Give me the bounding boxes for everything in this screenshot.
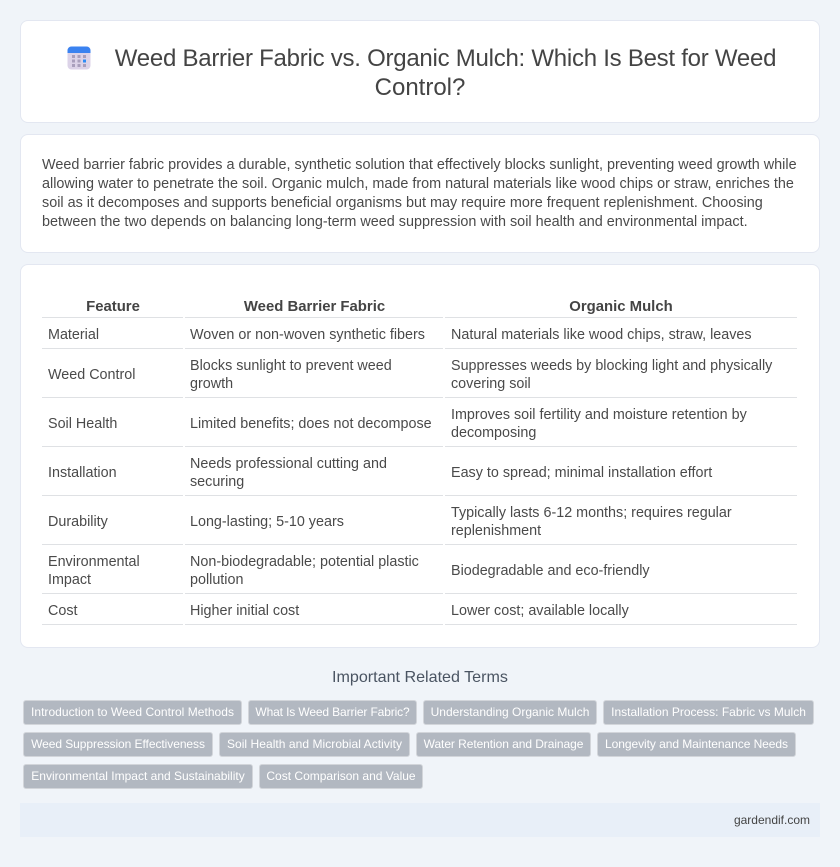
related term tags: What Is Weed Barrier Fabric?: [255, 705, 410, 719]
related term tags: Introduction to Weed Control Methods: [31, 705, 234, 719]
row: weed control: Weed Control: [48, 367, 135, 383]
related term tags: Installation Process: Fabric vs Mulch: [611, 705, 806, 719]
row: material: Material: [48, 327, 99, 343]
row: soil health: [48, 407, 747, 441]
row: soil health: Soil Health: [48, 416, 117, 432]
row: soil health: decomposing: [451, 425, 536, 441]
row: cost: [48, 603, 629, 619]
icon: calendar: [68, 46, 90, 70]
row: installation: Installation: [48, 465, 117, 481]
row: durability: replenishment: [451, 523, 541, 539]
row: environmental impact: Environmental: [48, 554, 140, 570]
row: durability: [48, 505, 732, 539]
intro text: [42, 157, 797, 230]
title: Control?: [375, 74, 465, 101]
intro text: between the two depends on balancing long-term weed suppression with soil health and environmental impact.: [42, 214, 748, 230]
row: installation: Easy to spread; minimal installation effort: [451, 465, 712, 481]
related terms heading: Important Related Terms: [332, 668, 508, 686]
footer source: gardendif.com: [734, 813, 810, 827]
related term tags: Weed Suppression Effectiveness: [31, 737, 205, 751]
comparison table panel: [20, 264, 820, 648]
related term tags: Soil Health and Microbial Activity: [227, 737, 402, 751]
row: cost: Cost: [48, 603, 78, 619]
intro text: Weed barrier fabric provides a durable, synthetic solution that effectively blocks sunlight, preventing weed growth while: [42, 157, 797, 173]
row: weed control: Suppresses weeds by blocking light and physically: [451, 358, 772, 374]
row: installation: Needs professional cutting and: [190, 456, 387, 472]
intro text: soil as it decomposes and supports beneficial organisms but may require more frequent replenishment. Choosing: [42, 195, 763, 211]
intro text: allowing water to penetrate the soil. Organic mulch, made from natural materials like wood chips or straw, enriches the: [42, 176, 794, 192]
row: cost: Lower cost; available locally: [451, 603, 629, 619]
row: durability: Long-lasting; 5-10 years: [190, 514, 344, 530]
row: weed control: covering soil: [451, 376, 531, 392]
row: material: Woven or non-woven synthetic fibers: [190, 327, 425, 343]
row: durability: Durability: [48, 514, 108, 530]
title: Weed Barrier Fabric vs. Organic Mulch: Which Is Best for Weed: [115, 45, 776, 72]
row: material: [48, 327, 752, 343]
title: [114, 45, 776, 101]
row: environmental impact: Impact: [48, 572, 91, 588]
row: environmental impact: pollution: [190, 572, 243, 588]
related term tags: Environmental Impact and Sustainability: [31, 769, 245, 783]
footer bar: [20, 803, 820, 837]
related term tags: Water Retention and Drainage: [424, 737, 583, 751]
row: installation: [48, 456, 712, 490]
row: environmental impact: Biodegradable and eco-friendly: [451, 563, 650, 579]
row: cost: Higher initial cost: [190, 603, 299, 619]
row: installation: securing: [190, 474, 244, 490]
related term tags: [23, 700, 814, 789]
table header: feature: Feature: [86, 299, 140, 315]
row: environmental impact: [48, 554, 650, 588]
row: durability: Typically lasts 6-12 months; requires regular: [451, 505, 732, 521]
table header: organic mulch: Organic Mulch: [569, 299, 673, 315]
row: environmental impact: Non-biodegradable; potential plastic: [190, 554, 419, 570]
row: weed control: Blocks sunlight to prevent weed: [190, 358, 392, 374]
row: soil health: Limited benefits; does not decompose: [190, 416, 432, 432]
row: material: Natural materials like wood chips, straw, leaves: [451, 327, 752, 343]
header panel: [20, 20, 820, 123]
related term tags: Longevity and Maintenance Needs: [605, 737, 788, 751]
row: weed control: [48, 358, 772, 392]
intro panel: [20, 134, 820, 253]
row: soil health: Improves soil fertility and moisture retention by: [451, 407, 747, 423]
related term tags: Cost Comparison and Value: [266, 769, 416, 783]
row: weed control: growth: [190, 376, 233, 392]
table header: weed barrier fabric: Weed Barrier Fabric: [244, 299, 385, 315]
related term tags: Understanding Organic Mulch: [431, 705, 589, 719]
